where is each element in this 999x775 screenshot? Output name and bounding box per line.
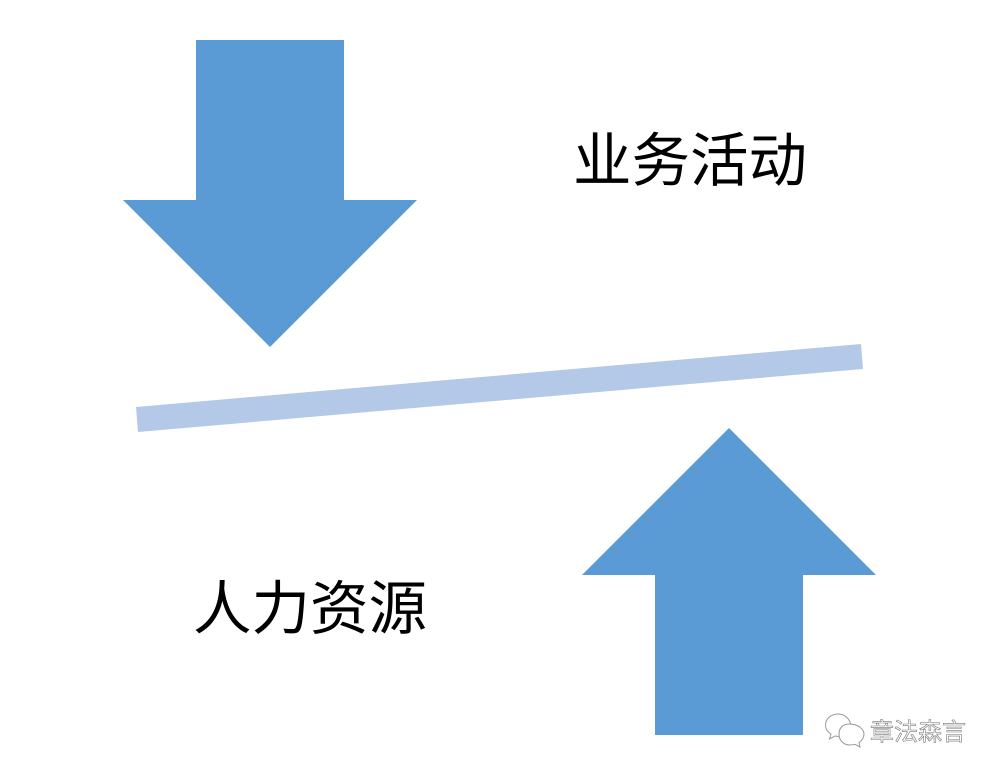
watermark text: 章法森言	[870, 719, 966, 746]
arrow: down arrow (business activities)	[123, 40, 417, 347]
icon: WeChat bubbles	[826, 714, 864, 747]
heading: human resources: 人力资源	[193, 577, 427, 642]
arrow: up arrow (human resources)	[582, 428, 876, 735]
watermark: WeChat account	[826, 714, 966, 747]
heading: business activities: 业务活动	[573, 129, 807, 194]
balance bar	[136, 344, 863, 432]
